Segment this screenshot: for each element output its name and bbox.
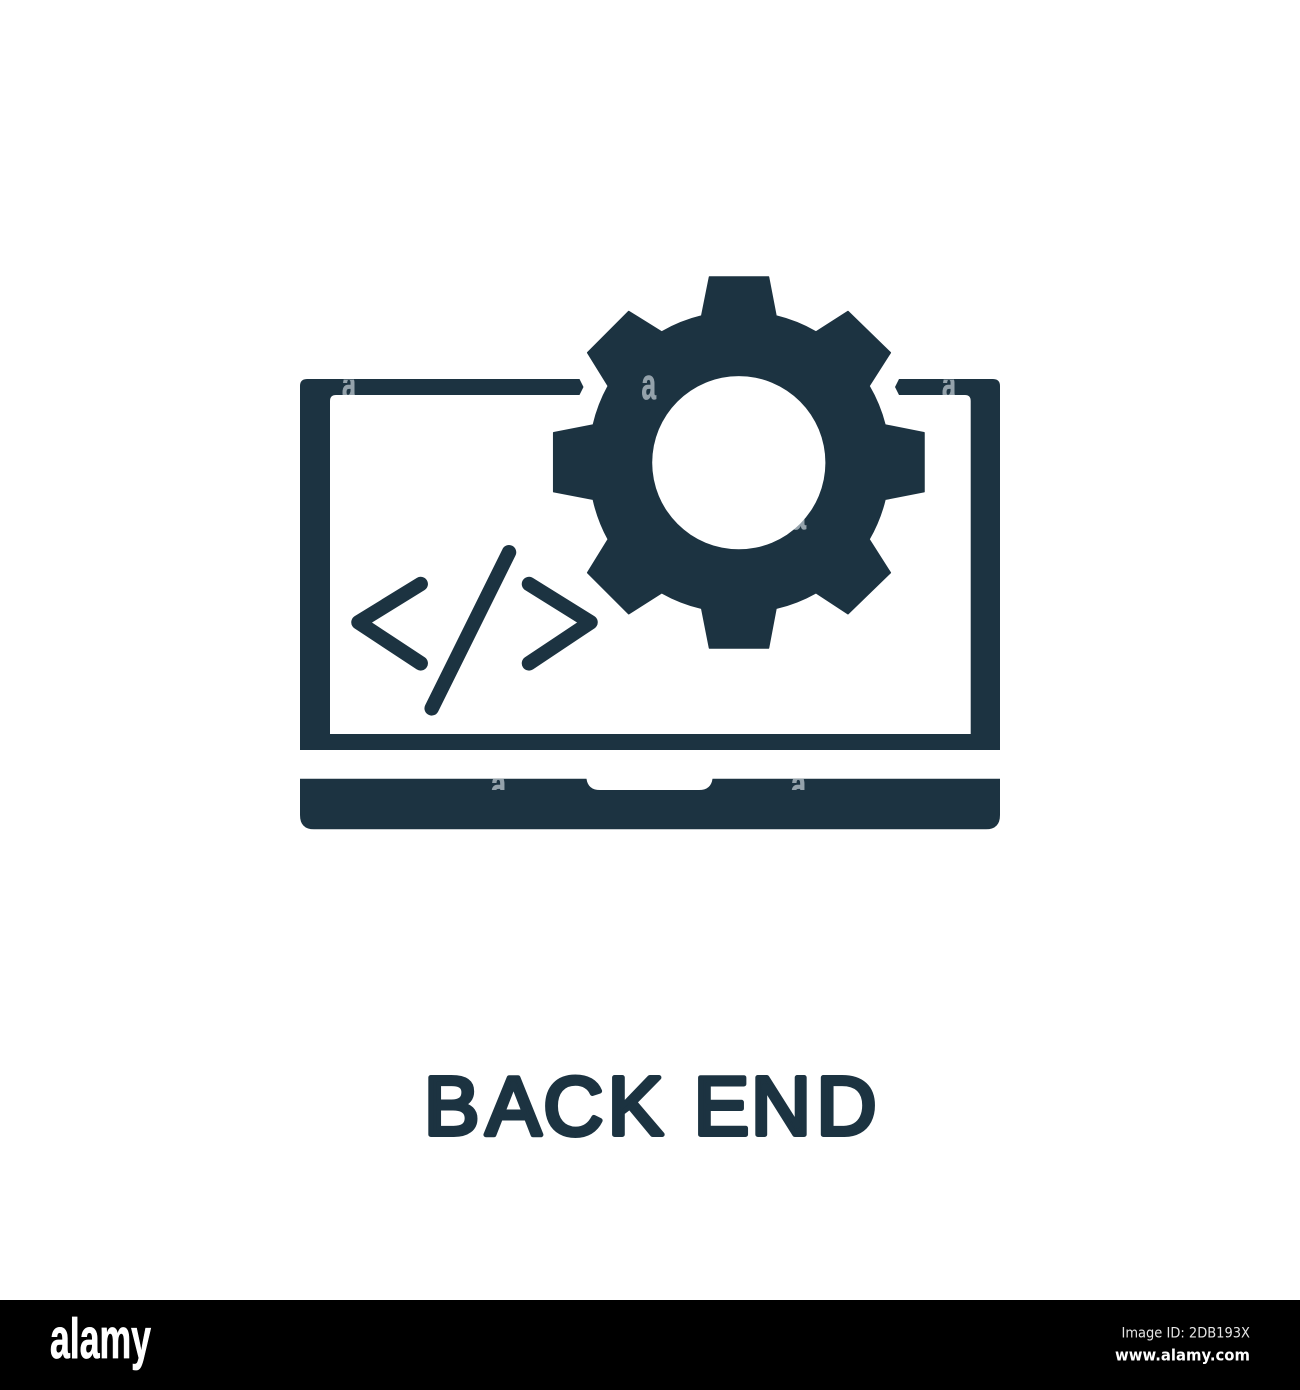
watermark marks on the laptop frame: a (942, 360, 956, 409)
image id: Image ID: 2DB193X (1122, 1326, 1250, 1342)
left bracket (358, 584, 421, 663)
footer bar (0, 1300, 1300, 1390)
laptop screen frame (300, 379, 1000, 750)
logo text: alamy (50, 1307, 151, 1371)
icon: gear (554, 277, 924, 648)
watermark on gear right: a (791, 490, 806, 539)
icon: laptop with gear and code (300, 277, 1000, 829)
watermark marks on the laptop base (492, 779, 804, 790)
watermark on gear left: a (642, 360, 656, 409)
watermark marks on the laptop frame: a (342, 360, 356, 409)
website: www.alamy.com (1115, 1346, 1250, 1364)
watermark marks on the laptop base: a (791, 760, 806, 809)
gear hole (652, 376, 825, 549)
footer background (0, 1300, 1300, 1390)
watermark marks on the laptop base: a (491, 760, 506, 809)
laptop base with notch (300, 779, 1000, 829)
title: BACK END (424, 1060, 876, 1152)
gear body (554, 277, 924, 648)
watermark marks on the laptop frame (342, 380, 955, 395)
icon: code brackets (358, 552, 590, 708)
slash (432, 552, 509, 708)
right bracket (529, 584, 590, 663)
